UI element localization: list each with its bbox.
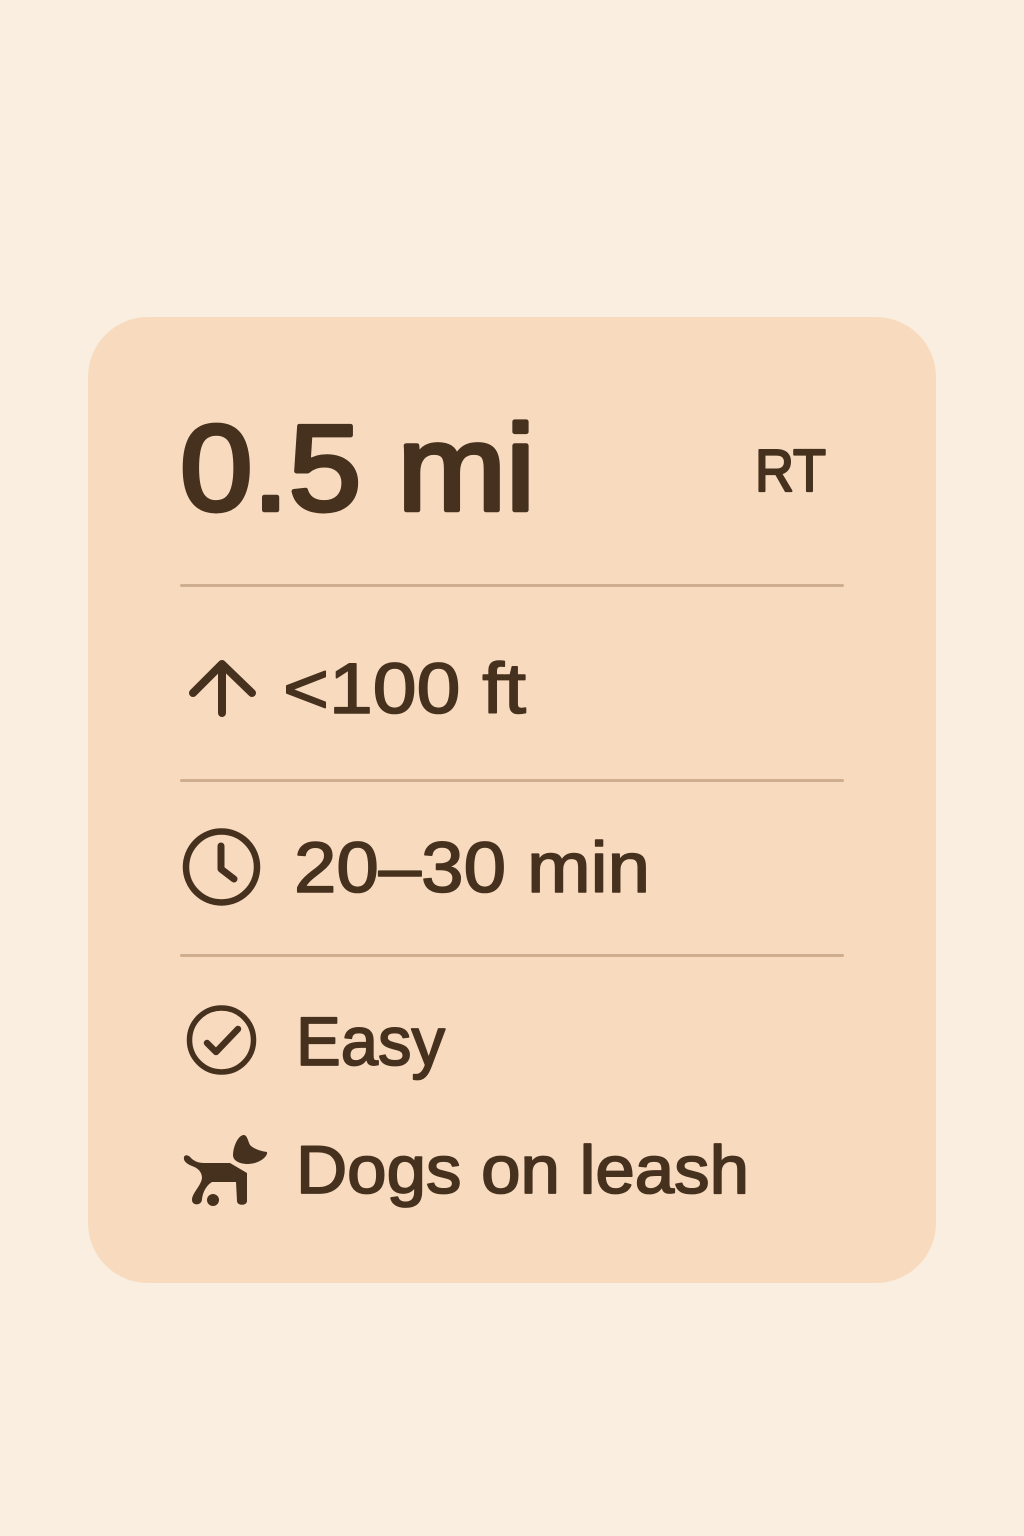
icon: clock: [186, 832, 257, 902]
panel: trail stats card: [88, 317, 936, 1283]
row: duration: [186, 829, 650, 908]
icon: check circle: [190, 1008, 254, 1072]
icon: dog: [184, 1135, 267, 1206]
row: dog policy: [184, 1132, 749, 1208]
dog policy value: Dogs on leash: [296, 1132, 749, 1208]
row: difficulty: [190, 1003, 445, 1080]
icon: up arrow: [193, 664, 252, 713]
divider: below duration: [180, 954, 844, 957]
duration value: 20–30 min: [294, 829, 650, 908]
divider: below distance: [180, 584, 844, 587]
round trip label: RT: [755, 438, 826, 504]
difficulty value: Easy: [296, 1003, 445, 1080]
distance value: 0.5 mi: [180, 400, 535, 536]
row: elevation gain: [193, 650, 526, 729]
elevation value: <100 ft: [283, 650, 526, 729]
divider: below elevation: [180, 779, 844, 782]
